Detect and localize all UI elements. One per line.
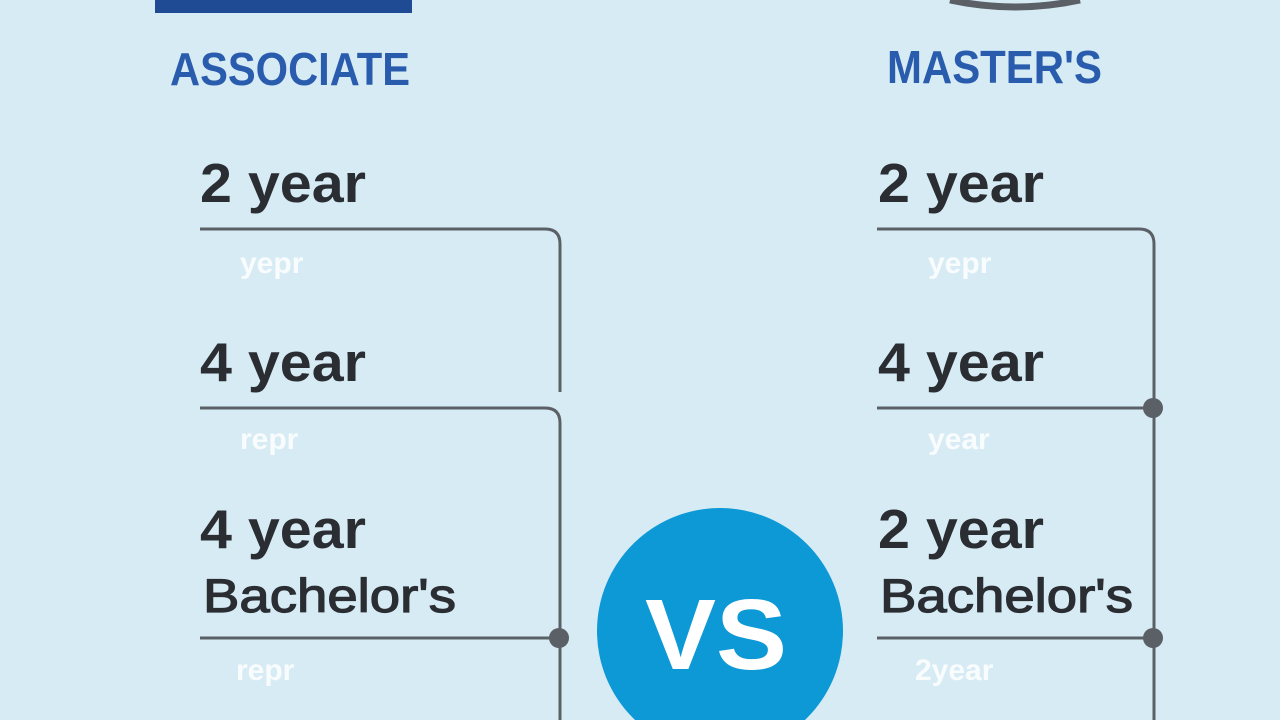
label: 4 year bachelor's bbox=[200, 498, 456, 622]
label: 2 year bachelor's bbox=[878, 498, 1133, 622]
label: 4 year bachelor's: 4 year bbox=[200, 498, 366, 560]
label: 4 year: 4 year bbox=[200, 331, 366, 393]
faint label: 2year bbox=[915, 654, 994, 687]
label: 2 year bachelor's: 2 year bbox=[878, 498, 1044, 560]
label: 4 year: 4 year bbox=[878, 331, 1044, 393]
faint label: yepr bbox=[928, 247, 992, 280]
label: 2 year: 2 year bbox=[878, 152, 1044, 214]
faint label: yepr bbox=[240, 247, 304, 280]
badge: VS bbox=[597, 508, 843, 720]
panel: associate timeline bbox=[200, 152, 569, 720]
badge: VS: VS bbox=[645, 579, 787, 691]
panel: master's timeline bbox=[877, 152, 1163, 720]
icon: master's emblem arc bbox=[950, 0, 1080, 7]
label: 4 year bachelor's: Bachelor's bbox=[203, 569, 456, 622]
heading: associate: ASSOCIATE bbox=[170, 43, 410, 95]
faint label: repr bbox=[236, 654, 295, 687]
heading: master's: MASTER'S bbox=[887, 41, 1102, 93]
label: 2 year bachelor's: Bachelor's bbox=[880, 569, 1133, 622]
faint label: repr bbox=[240, 423, 299, 456]
icon: associate header block bbox=[155, 0, 412, 13]
label: 2 year: 2 year bbox=[200, 152, 366, 214]
faint label: year bbox=[928, 423, 990, 456]
